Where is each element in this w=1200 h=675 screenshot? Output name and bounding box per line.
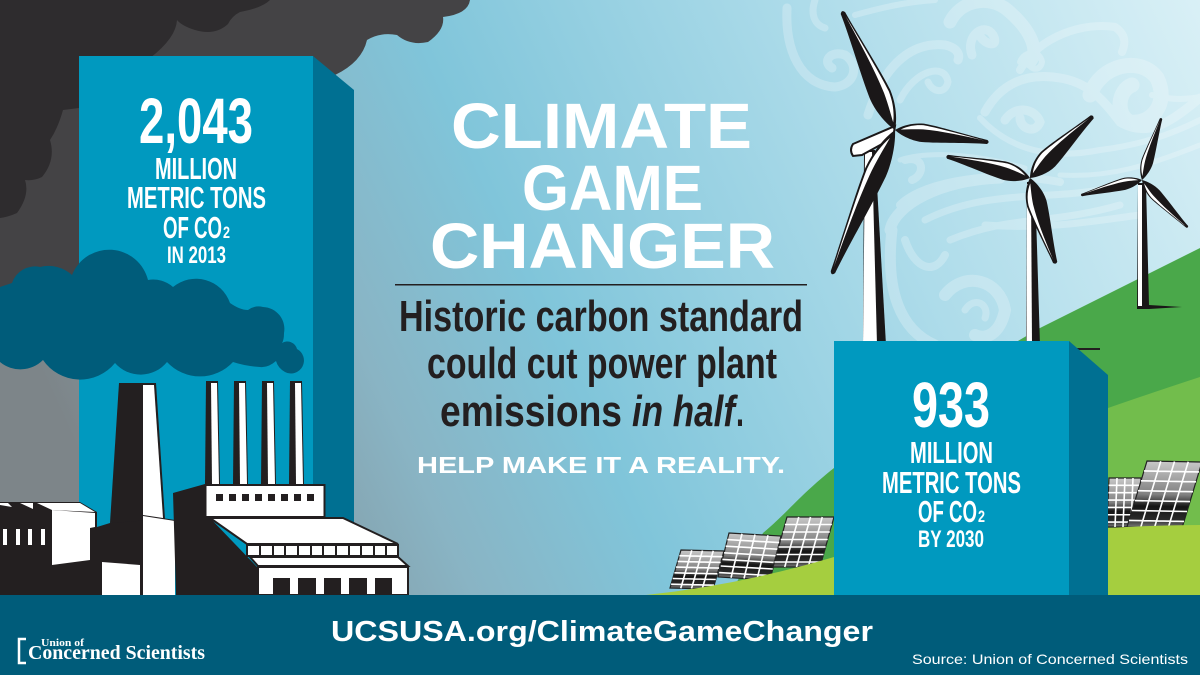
solar panels: left array — [670, 517, 834, 589]
source note: Source: Union of Concerned Scientists — [912, 651, 1188, 667]
swirling wind pattern — [787, 0, 1200, 345]
wind turbine: far right — [1079, 116, 1192, 309]
label: million: MILLION — [155, 151, 237, 186]
subheading: in half — [632, 387, 738, 436]
smoke cloud: gray — [0, 0, 470, 320]
smoke cloud: teal — [0, 250, 304, 380]
four smokestacks — [205, 381, 304, 484]
subheading — [399, 292, 803, 436]
footer band — [0, 595, 1200, 675]
hill: dark green — [730, 248, 1200, 595]
label: in 2013: IN 2013 — [167, 242, 226, 269]
subheading: . — [736, 387, 744, 436]
wind turbine: middle — [944, 108, 1100, 345]
label: of CO2: OF CO — [163, 210, 222, 245]
solar panels: right array — [1107, 461, 1200, 528]
hill: lime foreground left — [646, 557, 834, 595]
website URL: UCSUSA.org/ClimateGameChanger — [331, 616, 873, 648]
title: CLIMATE — [451, 90, 752, 162]
logo: Union of Concerned Scientists: Union of — [41, 637, 84, 649]
subheading: emissions — [440, 387, 622, 436]
label: subscript 2: 2 — [223, 223, 230, 242]
bar: 2030 emissions — [834, 341, 1108, 595]
title: GAME — [522, 152, 703, 224]
hill: lime foreground right — [1108, 525, 1200, 595]
label: of CO2: OF CO — [918, 494, 977, 529]
right building — [173, 484, 408, 595]
title: CHANGER — [430, 210, 775, 282]
logo: Union of Concerned Scientists: Concerned Scientists — [28, 642, 205, 664]
wind turbine: large left — [821, 6, 990, 345]
turbine base shadow — [1077, 348, 1100, 350]
label: million: MILLION — [910, 435, 993, 470]
label: by 2030: BY 2030 — [918, 526, 984, 553]
value: 933: 933 — [912, 369, 990, 441]
subheading: could cut power plant — [427, 339, 777, 388]
value: 2,043: 2,043 — [139, 85, 253, 157]
hill: medium green — [1108, 377, 1200, 595]
smoke cloud: black — [0, 0, 270, 218]
factory illustration — [0, 381, 408, 595]
large chimney — [110, 383, 175, 595]
label: metric tons: METRIC TONS — [882, 465, 1021, 500]
title divider — [395, 284, 807, 286]
label: subscript 2: 2 — [978, 507, 985, 526]
bar: 2013 emissions — [79, 56, 354, 595]
title — [430, 90, 775, 282]
left building — [0, 502, 175, 595]
label: metric tons: METRIC TONS — [127, 180, 266, 215]
call to action: HELP MAKE IT A REALITY. — [417, 452, 785, 478]
subheading: Historic carbon standard — [399, 292, 803, 341]
